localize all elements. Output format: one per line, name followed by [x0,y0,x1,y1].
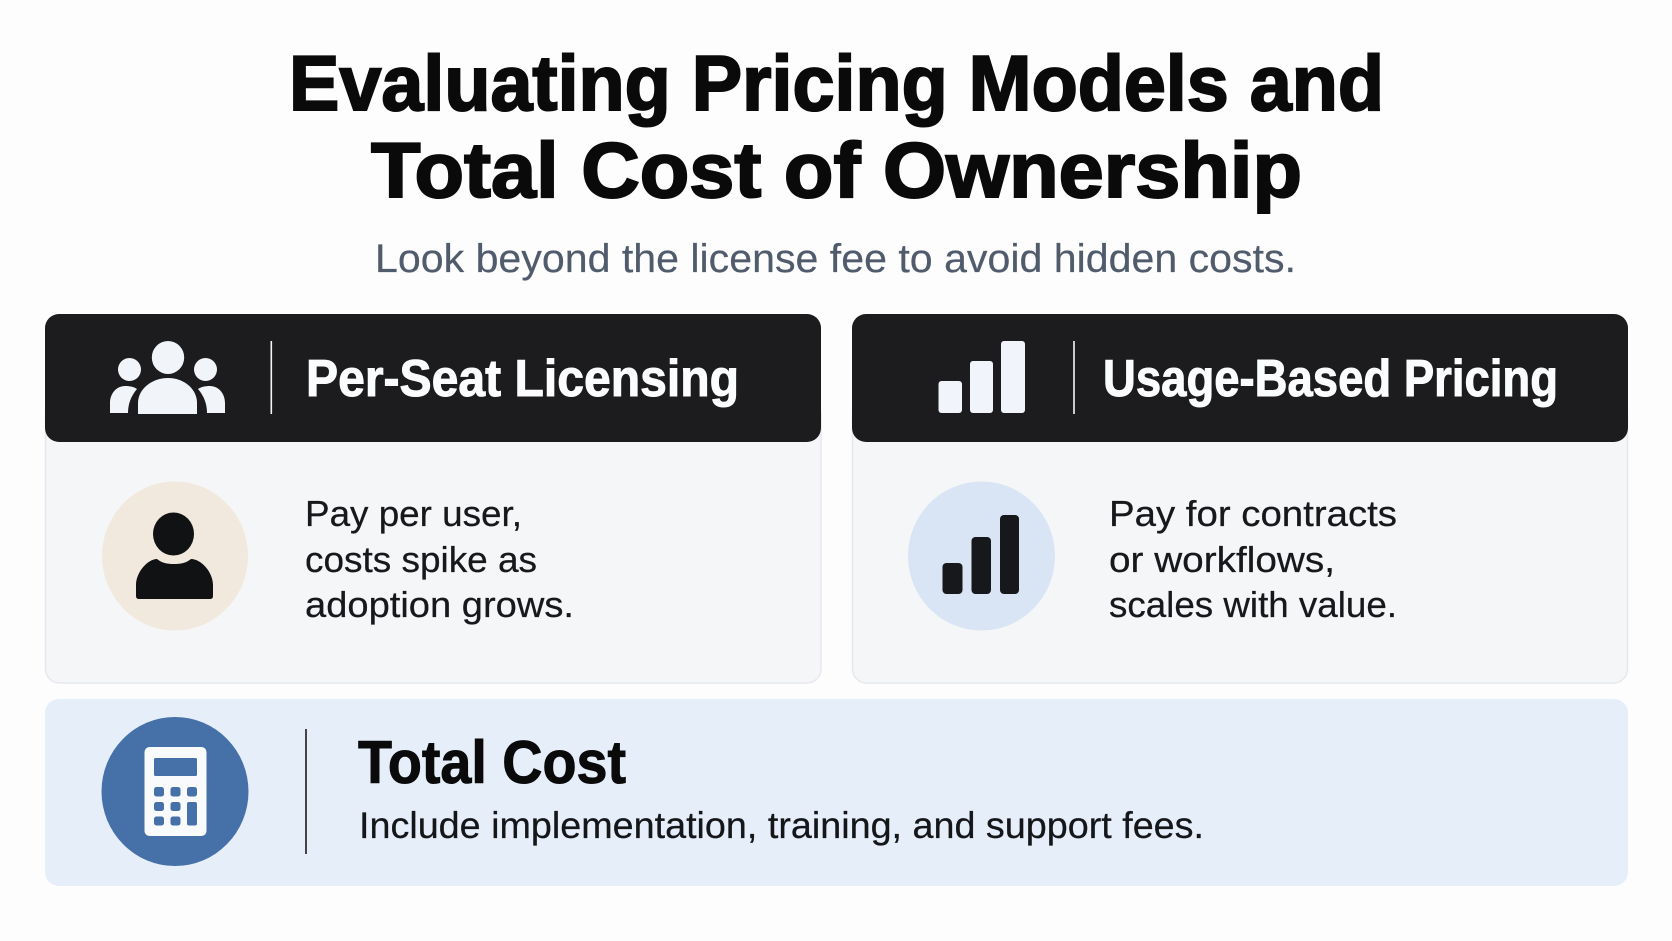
heading: total cost: Total Cost [358,729,626,796]
panel: total cost [45,699,1628,886]
header bar: usage [852,314,1628,442]
body text: usage: or workflows, [1109,539,1335,580]
body text: usage: scales with value. [1109,584,1397,625]
title: Evaluating Pricing Models and [289,39,1384,127]
body text: usage [1109,493,1397,625]
band background [45,699,1628,886]
divider [270,341,272,414]
body text: per-seat [305,493,574,625]
heading: per-seat licensing: Per-Seat Licensing [306,350,739,408]
heading: usage-based pricing: Usage-Based Pricing [1103,350,1558,408]
icon: group of people [110,341,225,414]
body text: per-seat: adoption grows. [305,584,574,625]
divider [1073,341,1075,414]
subtitle: Look beyond the license fee to avoid hidden costs. [375,237,1296,281]
icon: person in beige circle [102,482,248,630]
body text: per-seat: costs spike as [305,539,537,580]
divider [305,729,307,854]
icon: calculator [102,717,248,866]
icon: header bars [938,341,1025,413]
icon: bars in blue circle [908,482,1055,630]
title [289,39,1384,214]
panel: per-seat licensing [45,314,821,683]
body text: total cost: Include implementation, training, and support fees. [359,805,1204,846]
title: Total Cost of Ownership [371,126,1302,214]
body text: usage: Pay for contracts [1109,493,1397,534]
body text: per-seat: Pay per user, [305,493,522,534]
panel: usage-based pricing [852,314,1628,683]
header bar: per-seat [45,314,821,442]
card body: per-seat [46,400,821,683]
card body: usage [852,400,1628,683]
